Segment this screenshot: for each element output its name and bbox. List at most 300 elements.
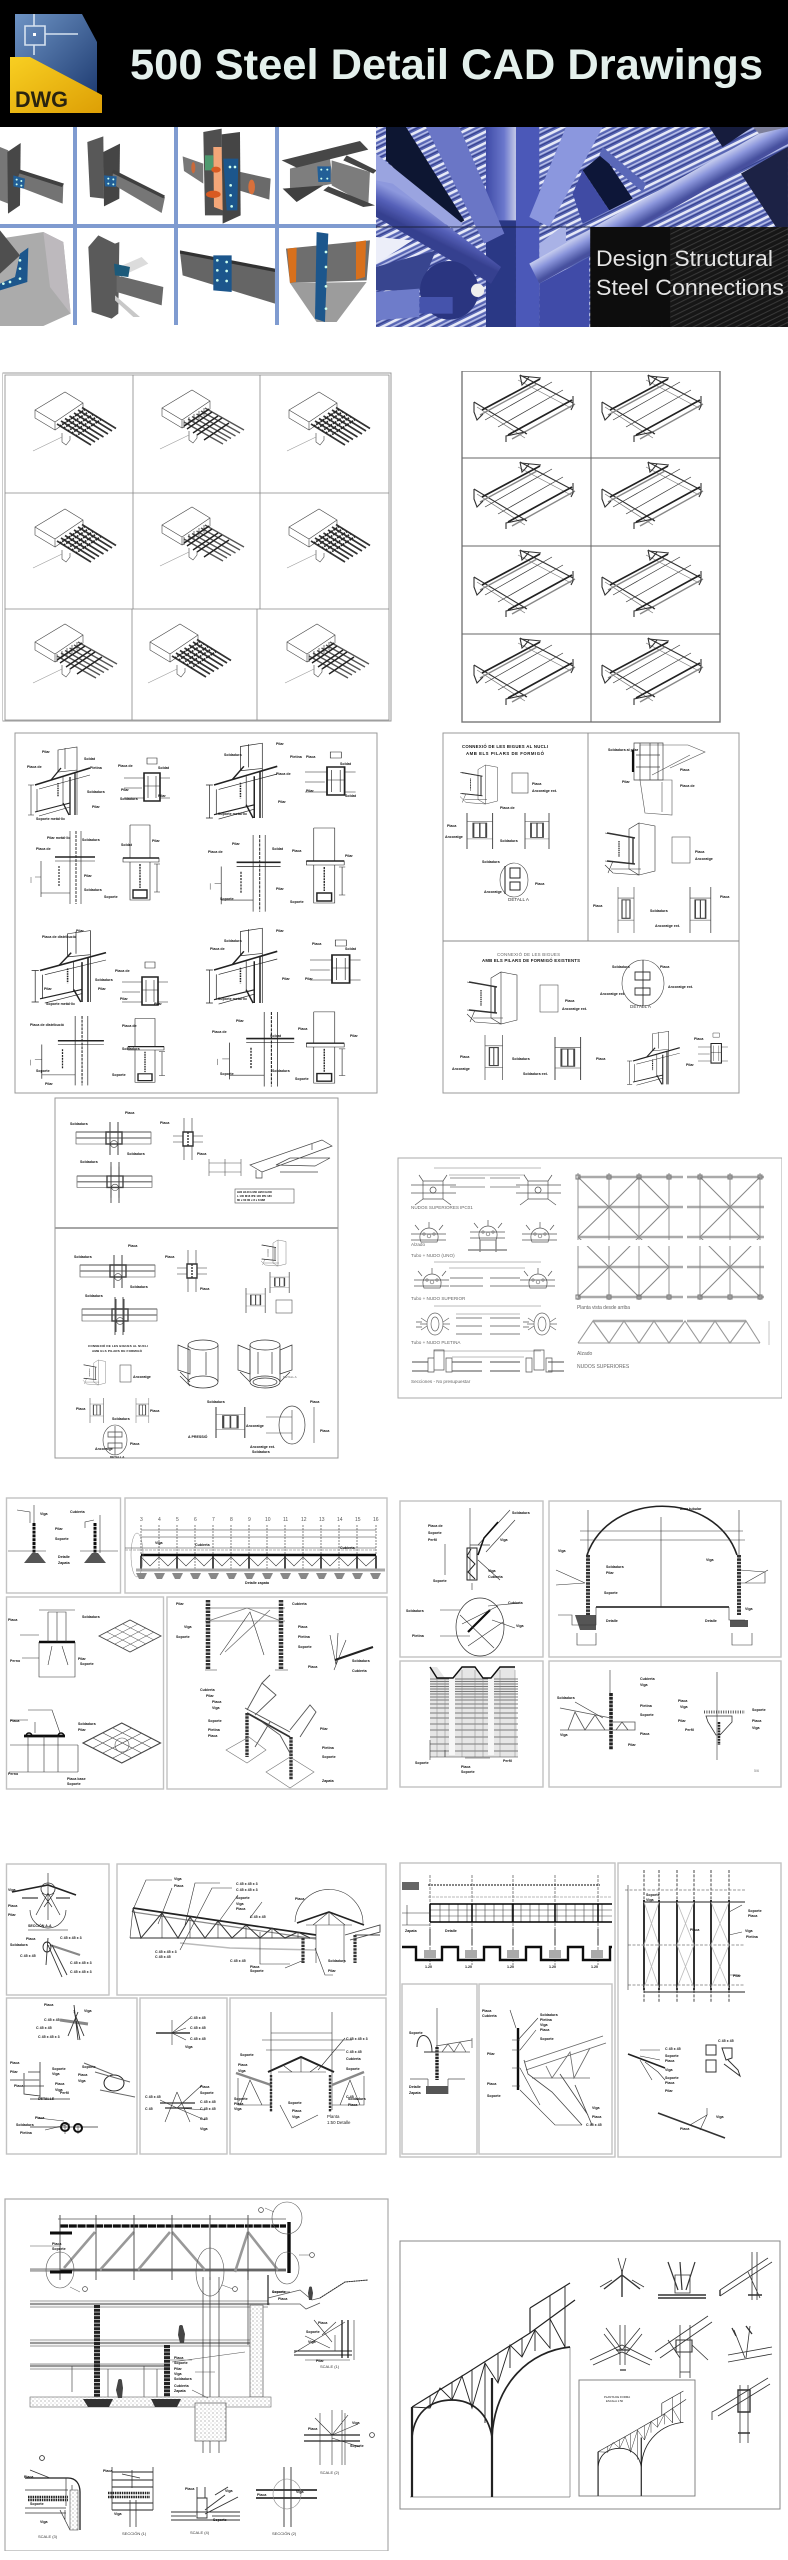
sub panel: truss to wall: Viga: [540, 2023, 549, 2027]
panel: connection details a: Placa: [44, 2003, 54, 2007]
panel: column grid and bracing: Viga: [665, 2068, 674, 2072]
panel: column grid and bracing: Viga: [745, 1929, 754, 1933]
detail group: upper left: Soporte metàl·lic: [36, 817, 65, 821]
panel: column base details: Pilar: [78, 1728, 86, 1732]
panel: building section with truss: [5, 2199, 388, 2551]
sheet: beams and existing concrete columns: Placa: [596, 1057, 606, 1061]
panel: truss to column: Cubierta: [640, 1677, 656, 1681]
panel: connection details b: C 45 x 45: [190, 2016, 206, 2020]
panel: space frame nodes: [398, 1158, 782, 1398]
sub panel: truss to wall: Soporte: [540, 2037, 554, 2041]
panel: eave details: Soporte: [433, 1579, 447, 1583]
node details column: Tubo + NUDO PLETINA: [411, 1340, 461, 1345]
panel: gable section: Placa: [348, 2103, 358, 2107]
thumbnail: beam to column 1: [0, 143, 64, 214]
grid numbers: 14: [337, 1517, 343, 1523]
detail group: lower left: [30, 929, 168, 1086]
sheet: beams and existing concrete columns: Placa: [660, 965, 670, 969]
sheet: beams and existing concrete columns: Ancoratge ext.: [600, 992, 625, 996]
detail group: lower right: Soldadura: [224, 939, 243, 943]
panel: column grid and bracing: Soporte: [646, 1893, 660, 1897]
panel: sloped truss section: Viga: [174, 1877, 183, 1881]
detail group: upper left: Pilar: [158, 794, 166, 798]
panel: arched section: Pilar: [606, 1571, 614, 1575]
detail group: upper left: Pilar: [92, 805, 100, 809]
panel: connection details b: C 45: [145, 2107, 153, 2111]
sub panel: column section: Soporte: [409, 2031, 423, 2035]
panel: ridge details: SECCIÓN A-A: [28, 1923, 52, 1928]
panel: corrugated sheet: Soporte: [461, 1770, 475, 1774]
detail group: upper right: Pletina: [290, 755, 303, 759]
panel: connection details b: C 45 x 45: [145, 2095, 161, 2099]
detail group: lower right: Soporte: [220, 1072, 234, 1076]
sheet: nucleus connection: DETALL A: [508, 897, 530, 902]
lower sheet: Placa: [320, 1429, 330, 1433]
panel: truss to column: Pilar: [678, 1719, 686, 1723]
roof truss: [30, 2202, 314, 2296]
floors and columns: Cubierta: [174, 2384, 190, 2388]
people figures: [116, 2287, 313, 2398]
upper sheet: Placa: [197, 1152, 207, 1156]
details row: Placa: [257, 2493, 267, 2497]
panel: arched section: [549, 1501, 781, 1657]
sheet: beams and existing concrete columns: Soldadura: [612, 965, 631, 969]
panel: sloped truss section: C 45 x 45: [155, 1955, 171, 1959]
panel: connection details b: C 45 x 45: [200, 2107, 216, 2111]
detail group: lower left: Pilar: [154, 1002, 162, 1006]
sheet: beam and column: Ancoratge ext.: [655, 924, 680, 928]
3D tree column: Pilar: [320, 1727, 328, 1731]
detail group: lower left: Soporte: [112, 1073, 126, 1077]
panel: ridge details: Pilar: [8, 1913, 16, 1917]
panel: column grid and bracing: Placa: [690, 1928, 700, 1932]
grid numbers: [140, 1517, 379, 1523]
detail group: upper right: [206, 742, 357, 912]
sheet: nucleus connection: [445, 744, 557, 902]
deck isometric row 1: [33, 390, 370, 451]
details row: Viga: [40, 2520, 49, 2524]
panel: truss to column: Perfil: [685, 1728, 694, 1732]
panel: portal frame and 3D view: Soporte: [298, 1645, 312, 1649]
details row: Placa: [103, 2469, 113, 2473]
panel: portal frame and 3D view: Cubierta: [352, 1669, 368, 1673]
panel: truss to column: Viga: [640, 1683, 649, 1687]
panel: gable section: 1:50 Detalle: [327, 2120, 351, 2125]
caption box: [590, 227, 788, 327]
detail group: lower left: Pilar: [44, 987, 52, 991]
panel: elevation and foundation: Detalle: [445, 1929, 457, 1933]
lower sheet: Ancoratge: [95, 1447, 113, 1451]
panel: truss to column: Pletina: [640, 1704, 653, 1708]
upper sheet: 80 x 60 80 x 8 x 8 MM: [237, 1198, 266, 1202]
details row: Placa: [185, 2487, 195, 2491]
panel: connection details a: Perfil: [60, 2091, 69, 2095]
upper sheet: Soldadura: [70, 1122, 89, 1126]
detail group: upper right: Soldat: [345, 794, 357, 798]
panel: purlin grid isometrics: [462, 371, 720, 722]
panel: gable section: Soporte: [234, 2097, 248, 2101]
detail group: lower left: Pilar: [98, 987, 106, 991]
inset panel: PLANTA DE FORMA: [604, 2395, 630, 2399]
panel: sloped truss section: Placa: [295, 1897, 305, 1901]
lower sheet: Ancoratge: [246, 1424, 264, 1428]
panel: column grid and bracing: Pilar: [665, 2089, 673, 2093]
grid numbers: 15: [355, 1517, 361, 1523]
lower sheet: Placa: [200, 1287, 210, 1291]
sub panel: truss to wall: Soldadura: [540, 2013, 559, 2017]
grid numbers: 5: [176, 1517, 179, 1523]
panel: arched section: Detalle: [705, 1619, 717, 1623]
detail group: upper left: Pilar metàl·lic: [47, 836, 70, 840]
panel: portal frame and 3D view: Placa: [308, 1665, 318, 1669]
panel: truss to column: Viga: [752, 1726, 761, 1730]
panel: ridge details: Placa: [8, 1904, 18, 1908]
panel: ridge details: [6, 1864, 109, 1995]
upper sheet: L 100 M16 IPE 100 IPE 180: [237, 1194, 272, 1198]
panel: connection details b: Placa: [200, 2085, 210, 2089]
floors and columns: Soporte: [174, 2361, 188, 2365]
panel: elevation and foundation: 1.20: [591, 1965, 598, 1969]
panel: gable section: C 45 x 45 x 3: [346, 2037, 368, 2041]
grid numbers: 6: [194, 1517, 197, 1523]
detail group: lower right: Soldadura: [272, 1069, 291, 1073]
detail group: upper right: Soporte: [220, 897, 234, 901]
details row: Placa: [24, 2475, 34, 2479]
detail group: upper right: Pilar: [306, 789, 314, 793]
lower sheet: Soldadura: [252, 1450, 271, 1454]
detail group: upper left: Pletina: [90, 766, 103, 770]
thumbnail: bracing connection: [88, 235, 163, 319]
panel: ridge details: C 45 x 45 x 3: [60, 1936, 82, 1940]
sheet: beams and existing concrete columns: CONNEXIÓ DE LES BIGUES: [497, 952, 560, 957]
panel: column grid and bracing: [618, 1863, 781, 2157]
thumbnail: girder connection: [282, 141, 377, 207]
detail group: upper left: Soldat: [158, 766, 170, 770]
details row: Viga: [225, 2489, 234, 2493]
node details column: Tubo + NUDO SUPERIOR: [411, 1296, 466, 1301]
detail: eave scale: SCALE (1): [320, 2364, 340, 2369]
detail group: upper left: Placa de: [118, 764, 133, 768]
sheet: beam and column: Placa: [680, 768, 690, 772]
detail group: upper left: Soldat: [84, 757, 96, 761]
detail group: lower left: Soporte: [36, 1069, 50, 1073]
panel: connection details a: Soporte: [52, 2067, 66, 2071]
panel: connection details b: C 45 x 45: [190, 2037, 206, 2041]
panel group: long building frames: [6, 1498, 387, 1789]
deck isometric row 3: [33, 624, 369, 683]
node details column: Alzado: [411, 1242, 425, 1247]
sheet: beam and column: Placa: [720, 895, 730, 899]
panel: column grid and bracing: Viga: [716, 2115, 725, 2119]
panel: bolted beam to tube connections: [55, 1098, 338, 1459]
panel: column grid and bracing: Pilar: [733, 1974, 741, 1978]
sheet: nucleus connection: Placa: [532, 782, 542, 786]
panel: column grid and bracing: Placa: [680, 2127, 690, 2131]
floors and columns: Placa: [174, 2356, 184, 2360]
panel: corrugated sheet: Placa: [461, 1765, 471, 1769]
sub panel: column section: [402, 1984, 477, 2154]
lower sheet: Soldadura: [130, 1285, 149, 1289]
detail group: upper left: Soldadura: [120, 797, 139, 801]
panel: gable section: Placa: [292, 2109, 302, 2113]
panel: arched section: Viga: [706, 1558, 715, 1562]
panel: wall sections: Soporte: [55, 1537, 69, 1541]
sheet: nucleus connection: Placa: [447, 824, 457, 828]
node details column: [411, 1168, 564, 1384]
detail group: upper left: Placa de: [27, 765, 42, 769]
detail group: lower left: Soldadura: [122, 1047, 141, 1051]
panel: gable section: Soporte: [288, 2101, 302, 2105]
panel: truss to column: Placa: [752, 1719, 762, 1723]
detail: eave scale: Viga: [308, 2340, 317, 2344]
grid numbers: 16: [373, 1517, 379, 1523]
panel: connection details a: Viga: [84, 2009, 93, 2013]
panel: elevation and foundation: 1.20: [465, 1965, 472, 1969]
panel: eave details: [400, 1501, 543, 1657]
lower sheet: A PRESSIÓ: [188, 1434, 208, 1439]
sheet: beams and existing concrete columns: Soldadura ext.: [523, 1072, 548, 1076]
caption: design structural steel connections: [596, 246, 784, 300]
lower sheet: [74, 1240, 330, 1459]
panel: eave details: Soldadura: [512, 1511, 531, 1515]
panel: connection details a: Placa: [10, 2061, 20, 2065]
sub panel: column section: Detalle: [409, 2085, 421, 2089]
elevation truss: [577, 1321, 769, 1370]
panel: ridge details: Soldadura: [10, 1943, 29, 1947]
icon: DWG file: [10, 14, 102, 113]
node details column: NUDOS SUPERIORES: [411, 1205, 459, 1210]
panel: truss to column: Soporte: [752, 1708, 766, 1712]
floors and columns: Soldadura: [174, 2377, 193, 2381]
thumbnail: hopper connection: [286, 232, 370, 322]
panel: elevation and foundation: [400, 1863, 615, 2157]
panel: gable section: [230, 1998, 386, 2154]
panel: long frame elevation: Cubierta: [340, 1546, 356, 1550]
panel: truss to column: Viga: [560, 1733, 569, 1737]
detail group: upper right: Placa: [306, 755, 316, 759]
panel: arched section: Viga: [558, 1549, 567, 1553]
panel: ridge details: C 45 x 45 x 3: [70, 1961, 92, 1965]
upper sheet: Soldadura: [127, 1152, 146, 1156]
sheet: nucleus connection: Ancoratge: [484, 890, 502, 894]
panel: column grid and bracing: Soporte: [665, 2054, 679, 2058]
detail: node scale: Viga: [352, 2421, 361, 2425]
inset panel: [579, 2380, 695, 2496]
sheet: beam and column: Soldadura al pilar: [608, 748, 639, 752]
panel: column base details: Soporte: [80, 1662, 94, 1666]
caption: design structural steel connections: Steel Connections: [596, 275, 784, 300]
detail group: upper left: Pilar: [121, 788, 129, 792]
panel: column grid and bracing: Placa: [665, 2059, 675, 2063]
detail group: upper left: Pilar: [152, 839, 160, 843]
panel: column base details: [6, 1597, 164, 1789]
panel: arched truss and details: [400, 2241, 780, 2509]
sheet: beam and column: [593, 743, 730, 933]
details row: SCALE (4): [190, 2530, 210, 2535]
panel: connection details a: DETALLE: [38, 2097, 55, 2101]
sheet: nucleus connection: Soldadura: [482, 860, 501, 864]
panel: corrugated sheet: [400, 1661, 543, 1787]
panel: wall sections: Cubierta: [70, 1510, 86, 1514]
panel: portal frame and 3D view: Viga: [184, 1625, 193, 1629]
panel: eave details: Viga: [488, 1569, 497, 1573]
deck isometric row 2: [33, 507, 370, 568]
title: 500 Steel Detail CAD Drawings: [130, 41, 763, 89]
3D tree column: [200, 1675, 336, 1788]
panel: connection details b: Viga: [200, 2127, 209, 2131]
panel: portal frame and 3D view: Cubierta: [292, 1602, 308, 1606]
panel: connection details b: C 45 x 45: [200, 2100, 216, 2104]
panel: portal frame and 3D view: Soldadura: [352, 1659, 371, 1663]
panel: arched section: Detalle: [606, 1619, 618, 1623]
cylinders: [178, 1340, 292, 1388]
panel: column base details: Placa base: [67, 1777, 86, 1781]
panel: column grid and bracing: Soporte: [748, 1909, 762, 1913]
panel: arched section: Soldadura: [606, 1565, 625, 1569]
sub panel: truss to wall: Pletina: [540, 2018, 553, 2022]
lower sheet: Soldadura: [85, 1294, 104, 1298]
sheet: beams and existing concrete columns: Placa: [694, 1037, 704, 1041]
sub panel: truss to wall: Placa: [482, 2009, 492, 2013]
detail: node scale: SCALE (2): [320, 2470, 340, 2475]
floors and columns: Pilar: [174, 2367, 182, 2371]
details row: Soporte: [213, 2518, 227, 2522]
panel: gable section: Soporte: [240, 2053, 254, 2057]
panel: truss to column: [549, 1661, 781, 1787]
lower sheet: Placa: [165, 1255, 175, 1259]
sub panel: truss to wall: Viga: [592, 2106, 601, 2110]
grid numbers: 11: [283, 1517, 288, 1523]
panel: wall sections: [6, 1498, 120, 1593]
detail group: lower right: Pilar: [350, 1034, 358, 1038]
panel: eave details: Cubierta: [508, 1601, 524, 1605]
sheet: nucleus connection: Soldadura: [500, 839, 519, 843]
detail group: upper left: [27, 747, 170, 904]
detail group: lower right: Soporte: [295, 1077, 309, 1081]
panel: long frame elevation: [125, 1498, 387, 1593]
panel: eave details: Perfil: [428, 1538, 437, 1542]
sheet: beam and column: Placa de: [680, 784, 695, 788]
lower sheet: Placa: [128, 1244, 138, 1248]
detail nodes: [590, 2252, 772, 2443]
detail group: upper right: Soldat: [272, 847, 284, 851]
panel: arched section: Soporte: [604, 1591, 618, 1595]
detail group: upper right: Pilar: [345, 854, 353, 858]
panel: column grid and bracing: Viga: [646, 1898, 655, 1902]
panel: composite deck isometrics: [2, 373, 391, 721]
sheet: beams and existing concrete columns: AMB ELS PILARS DE FORMIGÓ EXISTENTS: [482, 958, 580, 963]
detail group: lower right: Soldat: [270, 1034, 282, 1038]
sheet: nucleus connection: Placa de: [500, 806, 515, 810]
sheet: beams and existing concrete columns: Ancoratge ext.: [668, 985, 693, 989]
sub panel: truss to wall: Placa: [487, 2082, 497, 2086]
panel: long frame elevation: Cubierta: [195, 1543, 211, 1547]
grid numbers: 9: [248, 1517, 251, 1523]
details row: SECCIÓN (2): [272, 2531, 297, 2536]
elevation truss: NUDOS SUPERIORES: [577, 1364, 630, 1370]
panel: connection details a: Viga: [78, 2079, 87, 2083]
node details column: Secciones - No presupuestar: [411, 1379, 471, 1384]
sheet: beam and column: Placa: [695, 850, 705, 854]
panel: elevation and foundation: 1.20: [549, 1965, 556, 1969]
grid numbers: 8: [230, 1517, 233, 1523]
details row: SECCIÓN (1): [122, 2531, 147, 2536]
panel: truss to column: Soporte: [640, 1713, 654, 1717]
sheet: beams and existing concrete columns: DETALL A: [630, 1004, 652, 1009]
thumbnail: four way connection: [183, 129, 271, 224]
panel: elevation and foundation: Zapata: [405, 1929, 418, 1933]
panel: sloped truss section: Soporte: [250, 1969, 264, 1973]
panel: gable section: Soporte: [346, 2067, 360, 2071]
grid numbers: 7: [212, 1517, 215, 1523]
sheet: beams and existing concrete columns: Pilar: [686, 1063, 694, 1067]
panel: beam column connection details: [15, 733, 377, 1093]
panel: gable section: Placa: [238, 2063, 248, 2067]
detail group: upper left: Soldadura: [82, 838, 101, 842]
elevation truss: Alzado: [577, 1351, 593, 1357]
panel: portal frame and 3D view: Pilar: [176, 1602, 184, 1606]
panel: connection details b: Soporte: [200, 2091, 214, 2095]
floors and columns: Soporte: [272, 2290, 286, 2294]
panel: connection details a: Viga: [52, 2072, 61, 2076]
floors and columns: Zapata: [174, 2389, 187, 2393]
inset panel: ESCALA 1:50: [606, 2399, 624, 2403]
detail group: upper right: Placa de: [276, 772, 291, 776]
panel: column base details: Soporte: [67, 1782, 81, 1786]
sub panel: truss to wall: Soporte: [487, 2094, 501, 2098]
sheet: beams and existing concrete columns: Placa: [565, 999, 575, 1003]
thumbnail: beam splice: [180, 250, 275, 304]
panel: truss to column: Placa: [640, 1732, 650, 1736]
panel: gable section: Planta: [327, 2114, 340, 2119]
floors and columns: Placa: [278, 2297, 288, 2301]
panel: gable section: Viga: [292, 2115, 301, 2119]
sheet: beams and existing concrete columns: Ancoratge: [452, 1067, 470, 1071]
panel: gable section: Soldadura: [348, 2097, 367, 2101]
panel: wall sections: Zapata: [58, 1561, 71, 1565]
panel: column base details: Placa: [10, 1719, 20, 1723]
panel: connection details a: C 45 x 45 x 3: [38, 2035, 60, 2039]
thumbnail: beam to column 2: [87, 136, 165, 213]
header banner: [0, 0, 788, 127]
panel: eave details: Placa de: [428, 1524, 443, 1528]
icon: DWG file: DWG: [15, 87, 68, 112]
detail group: lower right: Soldat: [345, 947, 357, 951]
panel: gable section: Viga: [238, 2069, 247, 2073]
floors and columns: Viga: [174, 2372, 183, 2376]
3D tree column: Placa: [208, 1734, 218, 1738]
panel: ridge details: Viga: [8, 1888, 17, 1892]
sub panel: truss to wall: Cubierta: [482, 2014, 498, 2018]
3D tree column: Soporte: [208, 1719, 222, 1723]
3D tree column: Zapata: [322, 1779, 335, 1783]
lower sheet: DETALL A: [283, 1375, 297, 1379]
panel: connection details a: C 45 x 45: [36, 2026, 52, 2030]
detail: node scale: Soporte: [350, 2444, 364, 2448]
panel: gable section: Viga: [234, 2107, 243, 2111]
panel: gable section: Placa: [234, 2102, 244, 2106]
sheet: beam and column: Pilar: [622, 780, 630, 784]
panel: column base details: Pilar: [78, 1657, 86, 1661]
detail group: upper left: Pilar: [84, 874, 92, 878]
sheet: beams and existing concrete columns: [452, 952, 728, 1085]
panel: connection details b: [140, 1998, 227, 2154]
panel: truss to column: 5/6: [754, 1769, 759, 1773]
upper sheet: Placa: [160, 1121, 170, 1125]
panel: portal frame and 3D view: Placa: [298, 1625, 308, 1629]
panel: portal frame and 3D view: [167, 1597, 387, 1789]
floors and columns: [30, 2270, 368, 2453]
